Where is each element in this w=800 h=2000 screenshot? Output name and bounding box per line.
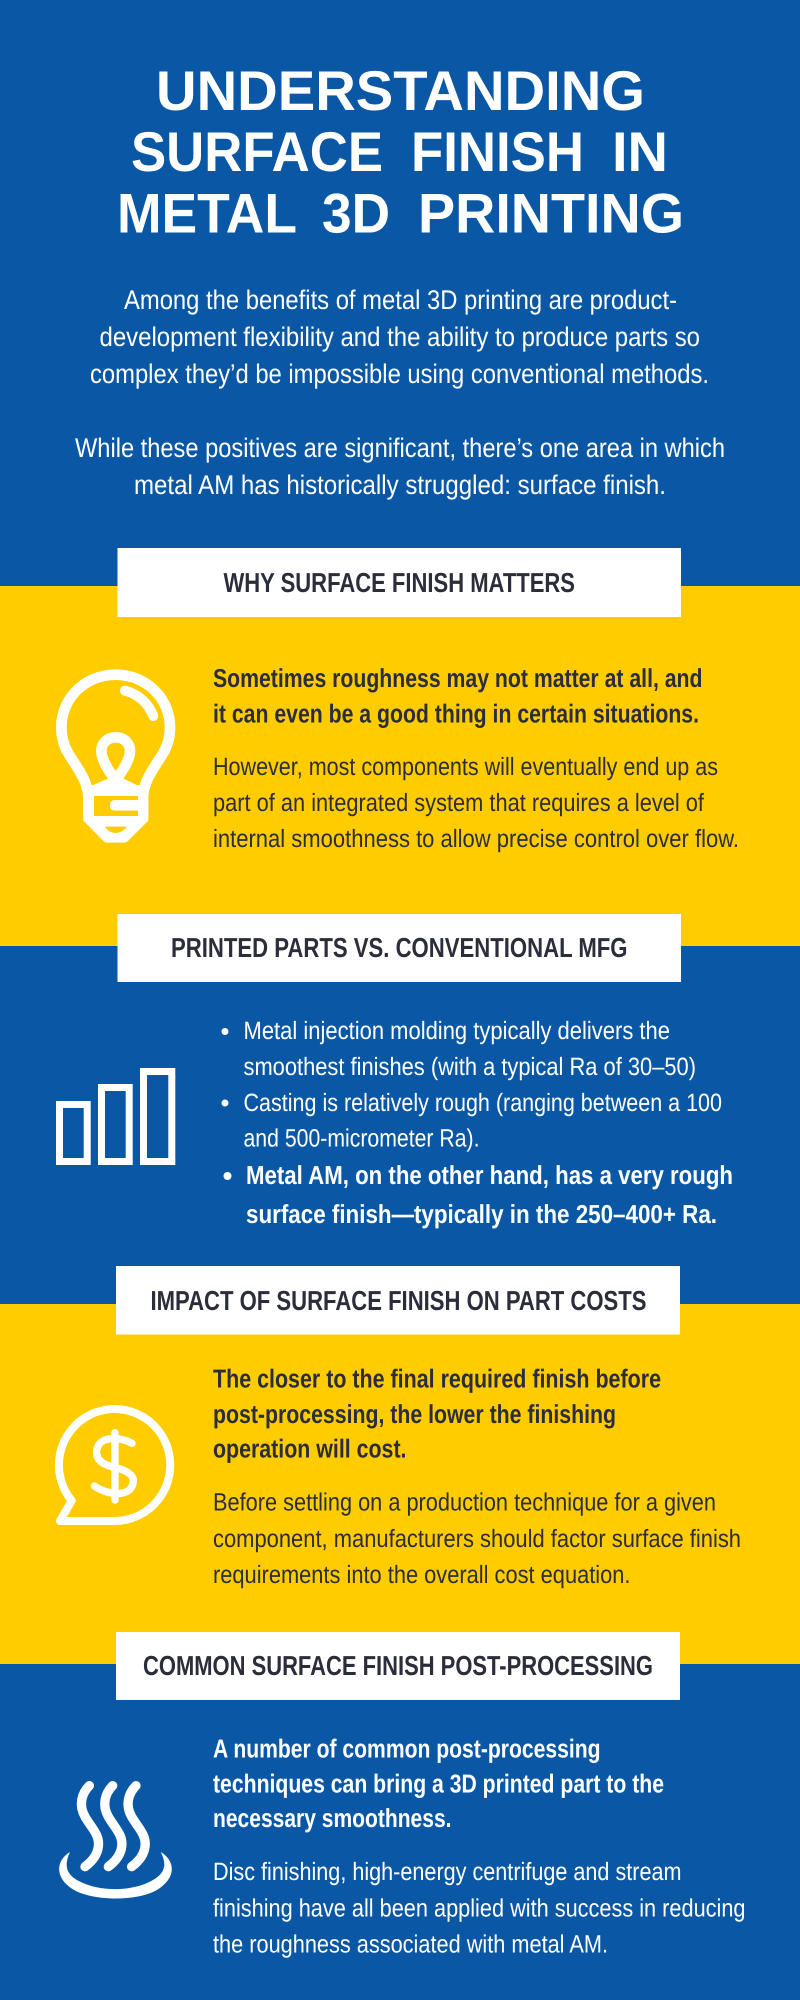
body copy — [213, 1488, 741, 1589]
panel: post-processing background — [0, 1664, 800, 2000]
bullet: casting: and 500-micrometer Ra). — [244, 1124, 480, 1152]
bullet: casting: Casting is relatively rough (ranging between a 100 — [244, 1089, 722, 1117]
body copy: part of an integrated system that requires a level of — [213, 789, 704, 817]
bullet: metal injection molding: smoothest finishes (with a typical Ra of 30–50) — [244, 1053, 696, 1081]
icon: steam — [59, 1786, 172, 1898]
bullet: metal injection molding — [222, 1017, 696, 1081]
body copy: Before settling on a production technique for a given — [213, 1488, 716, 1516]
heading: impact on part costs — [116, 1266, 680, 1334]
icon: light bulb — [61, 675, 170, 843]
bullet: casting — [222, 1089, 722, 1152]
title: UNDERSTANDING — [156, 59, 645, 122]
bold lead: A number of common post-processing — [213, 1734, 600, 1764]
text: part costs — [213, 1364, 741, 1589]
heading: common post-processing: COMMON SURFACE FINISH POST-PROCESSING — [143, 1650, 653, 1681]
title: METAL — [117, 182, 297, 244]
icon: bar chart — [60, 1072, 172, 1162]
bullet: metal AM: Metal AM, on the other hand, has a very rough — [246, 1160, 733, 1190]
body copy: the roughness associated with metal AM. — [213, 1930, 608, 1958]
text: why surface finish matters — [213, 663, 739, 853]
intro text: metal AM has historically struggled: surface finish. — [134, 470, 666, 500]
bullet list — [222, 1017, 733, 1229]
bold lead: operation will cost. — [213, 1434, 406, 1464]
bold lead: post-processing, the lower the finishing — [213, 1399, 616, 1429]
bullet: metal AM: surface finish—typically in the 250–400+ Ra. — [246, 1199, 717, 1229]
intro text: While these positives are significant, there’s one area in which — [75, 433, 725, 463]
intro text: development flexibility and the ability to produce parts so — [100, 322, 700, 352]
title: PRINTING — [418, 182, 684, 244]
body copy — [213, 753, 739, 853]
bold lead — [213, 663, 702, 728]
panel: intro background — [0, 0, 800, 586]
title: IN — [612, 120, 668, 183]
heading: why surface finish matters: WHY SURFACE FINISH MATTERS — [224, 567, 575, 598]
heading: why surface finish matters — [118, 548, 681, 617]
intro text: Among the benefits of metal 3D printing are product- — [124, 285, 677, 315]
panel: part costs background — [0, 1304, 800, 1664]
heading: printed parts vs conventional mfg — [118, 914, 681, 982]
title: FINISH — [411, 120, 584, 183]
intro text: complex they’d be impossible using conventional methods. — [90, 359, 709, 389]
heading: impact on part costs: IMPACT OF SURFACE FINISH ON PART COSTS — [150, 1285, 646, 1316]
panel: why surface finish matters background — [0, 586, 800, 946]
intro text — [75, 285, 725, 500]
body copy: component, manufacturers should factor surface finish — [213, 1525, 741, 1553]
bold lead: The closer to the final required finish before — [213, 1364, 661, 1394]
heading: printed parts vs conventional mfg: PRINTED PARTS VS. CONVENTIONAL MFG — [171, 932, 628, 963]
body copy: Disc finishing, high-energy centrifuge and stream — [213, 1858, 682, 1886]
bold lead: necessary smoothness. — [213, 1803, 452, 1833]
icon: dollar speech bubble — [59, 1409, 170, 1521]
bold lead — [213, 1734, 664, 1833]
bullet: metal AM — [224, 1160, 733, 1229]
bullet: metal injection molding: Metal injection molding typically delivers the — [244, 1017, 670, 1045]
bold lead: techniques can bring a 3D printed part to the — [213, 1768, 664, 1798]
body copy: However, most components will eventually end up as — [213, 753, 718, 781]
text: post-processing — [213, 1734, 746, 1958]
title — [117, 59, 684, 244]
heading: common post-processing — [116, 1632, 680, 1700]
body copy: internal smoothness to allow precise control over flow. — [213, 825, 739, 853]
bold lead — [213, 1364, 661, 1464]
body copy — [213, 1858, 746, 1958]
title: 3D — [322, 182, 390, 244]
bold lead: it can even be a good thing in certain situations. — [213, 698, 699, 728]
panel: printed parts background — [0, 946, 800, 1304]
body copy: requirements into the overall cost equation. — [213, 1561, 630, 1589]
title: SURFACE — [131, 120, 383, 183]
bold lead: Sometimes roughness may not matter at all, and — [213, 663, 702, 693]
